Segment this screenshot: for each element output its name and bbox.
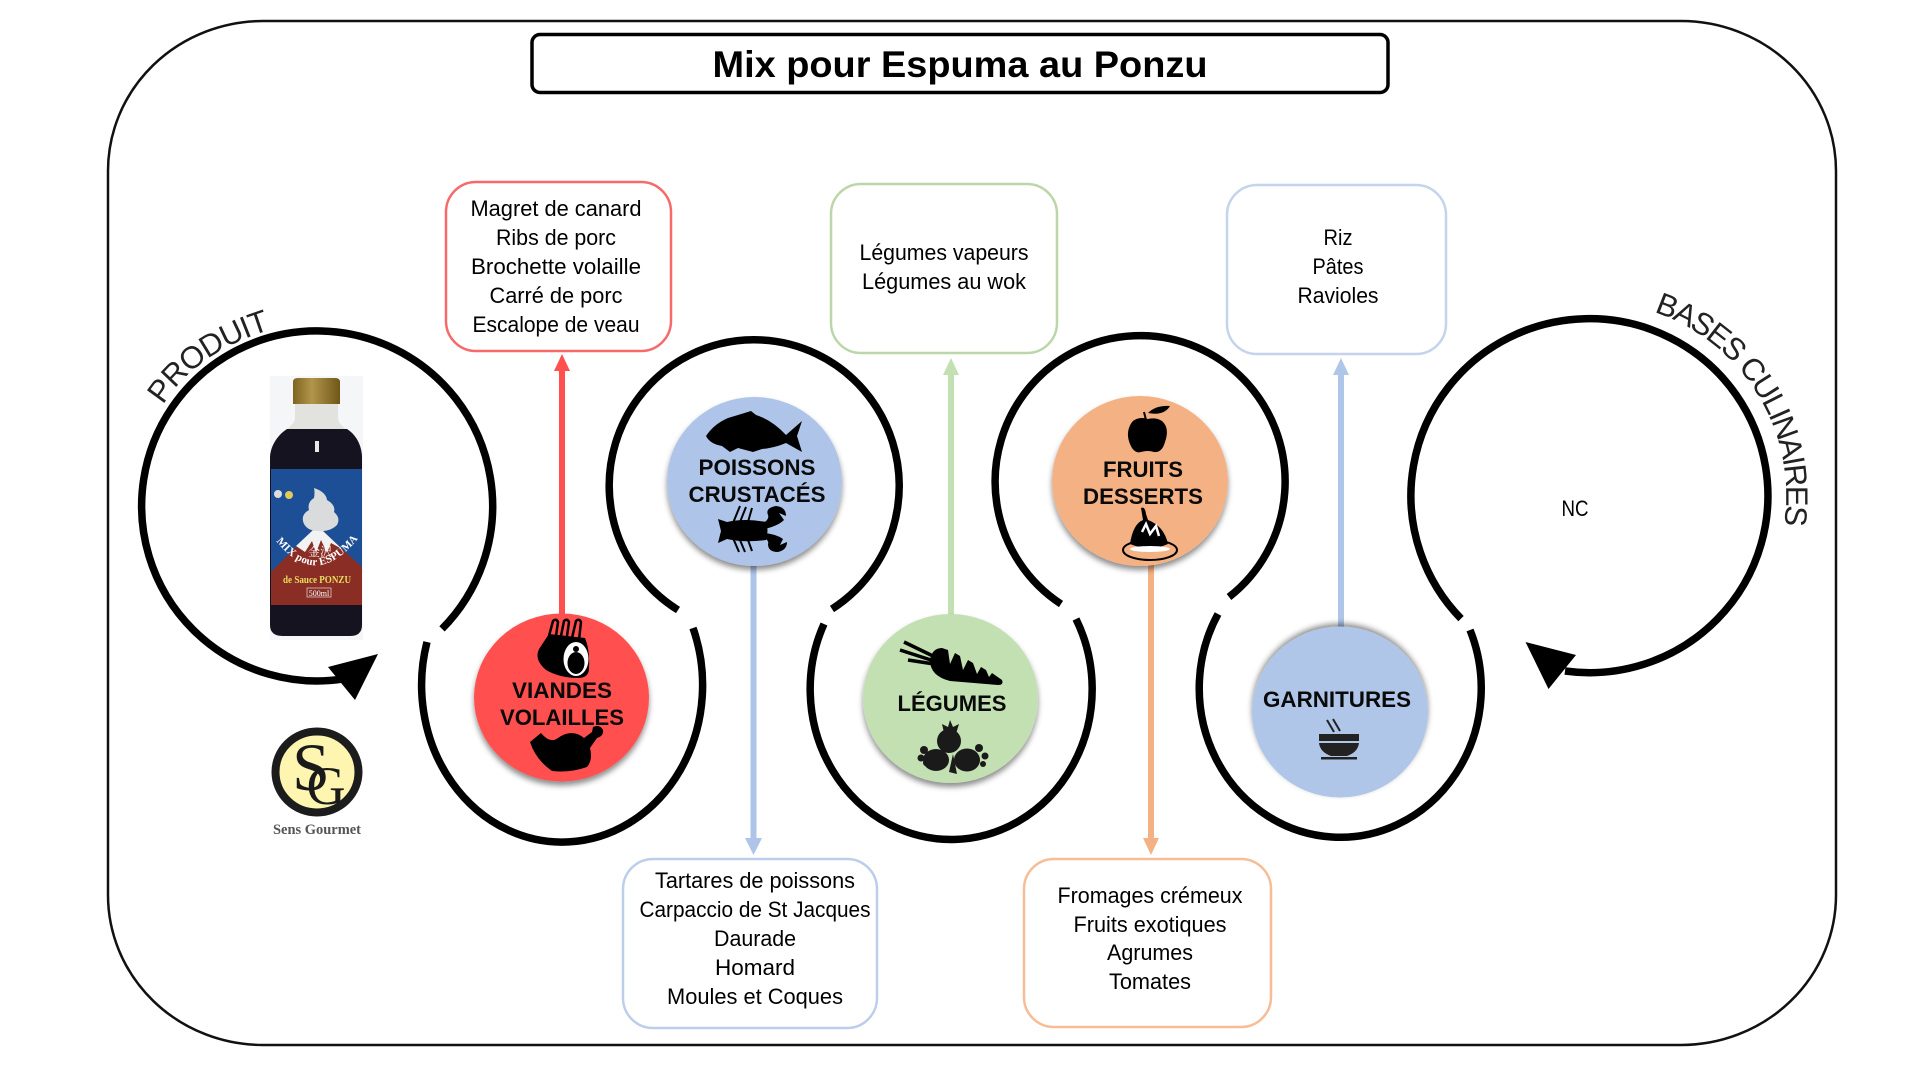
badge: viandes volailles: VOLAILLES	[500, 705, 624, 730]
loop: fruits ring	[995, 336, 1285, 604]
product bottle	[270, 376, 363, 640]
bottle liquid	[270, 429, 362, 636]
panel: legumes list	[831, 184, 1057, 353]
icon: fish	[706, 411, 802, 452]
panel: poissons list: Homard	[715, 955, 795, 980]
logo: sens gourmet	[273, 729, 361, 838]
panel: poissons list	[623, 859, 877, 1028]
loop: viandes ring	[422, 628, 703, 842]
panel: fruits list: Agrumes	[1107, 940, 1193, 965]
badge: fruits desserts	[1052, 396, 1228, 566]
bottle label: MIX pour ESPUMA	[276, 536, 358, 566]
panel: viandes list: Ribs de porc	[496, 225, 616, 250]
badge: viandes volailles	[474, 614, 649, 782]
arrow: fruits to box	[1143, 562, 1159, 855]
bottle label: de Sauce PONZU	[283, 575, 351, 586]
bottle label: 500ml	[309, 589, 330, 598]
text: bases culinaires value: NC	[1562, 496, 1589, 521]
badge: poissons crustaces: CRUSTACÉS	[688, 482, 826, 507]
arrow: garnitures to box	[1333, 358, 1349, 630]
arrow: viandes to box	[554, 354, 570, 616]
panel: viandes list: Magret de canard	[470, 196, 642, 221]
badge: poissons crustaces: POISSONS	[698, 455, 816, 480]
badge: legumes	[863, 614, 1038, 783]
panel: poissons list: Carpaccio de St Jacques	[640, 897, 870, 922]
loop: bases culinaires ring with arrow	[1411, 319, 1768, 689]
curved label: bases culinaires: BASES CULINAIRES	[1656, 292, 1808, 525]
badge: garnitures	[1252, 626, 1428, 798]
title	[532, 34, 1388, 92]
panel: poissons list: Tartares de poissons	[655, 868, 855, 893]
panel: poissons list: Daurade	[714, 926, 796, 951]
panel: fruits list	[1024, 859, 1271, 1027]
bottle glass	[270, 404, 362, 636]
loop: produit ring with arrow	[142, 331, 493, 700]
loop: garnitures ring	[1199, 614, 1481, 837]
panel: viandes list: Escalope de veau	[472, 312, 640, 337]
logo: sens gourmet: Sens Gourmet	[273, 822, 361, 838]
panel: garnitures list: Ravioles	[1298, 283, 1378, 308]
panel: garnitures list	[1227, 185, 1446, 354]
bottle label: 金沢	[308, 544, 332, 559]
badge: viandes volailles: VIANDES	[512, 678, 612, 703]
icon: radishes	[918, 720, 988, 774]
badge: poissons crustaces	[667, 397, 842, 566]
icon: dessert	[1123, 508, 1177, 560]
loop: legumes ring	[810, 619, 1092, 839]
logo: sens gourmet: G	[306, 756, 346, 816]
panel: viandes list: Brochette volaille	[471, 254, 641, 279]
panel: viandes list	[446, 182, 671, 351]
loop: poissons ring	[609, 340, 899, 610]
icon: rib rack	[537, 620, 589, 678]
arrow: poissons to box	[745, 562, 762, 855]
panel: fruits list: Fruits exotiques	[1074, 912, 1226, 937]
badge: fruits desserts: FRUITS	[1103, 457, 1183, 482]
logo: sens gourmet: S	[292, 729, 330, 805]
curved label: produit: PRODUIT	[147, 310, 264, 403]
icon: bowl	[1319, 719, 1359, 760]
badge: legumes: LÉGUMES	[898, 691, 1006, 716]
title: Mix pour Espuma au Ponzu	[712, 44, 1208, 85]
arrow: legumes to box	[943, 358, 959, 616]
panel: viandes list: Carré de porc	[490, 283, 622, 308]
panel: poissons list: Moules et Coques	[667, 984, 843, 1009]
bottle cap	[293, 378, 340, 404]
panel: garnitures list: Riz	[1324, 225, 1352, 250]
panel: garnitures list: Pâtes	[1312, 254, 1364, 279]
panel: legumes list: Légumes au wok	[862, 269, 1027, 294]
panel: fruits list: Tomates	[1109, 969, 1191, 994]
badge: fruits desserts: DESSERTS	[1083, 484, 1203, 509]
icon: lobster	[718, 506, 787, 552]
icon: carrot	[900, 642, 1002, 685]
icon: apple	[1128, 406, 1170, 452]
panel: legumes list: Légumes vapeurs	[860, 240, 1028, 265]
badge: garnitures: GARNITURES	[1263, 687, 1411, 712]
bottle label	[271, 469, 362, 605]
icon: roast chicken	[530, 726, 603, 772]
panel: fruits list: Fromages crémeux	[1058, 883, 1242, 908]
